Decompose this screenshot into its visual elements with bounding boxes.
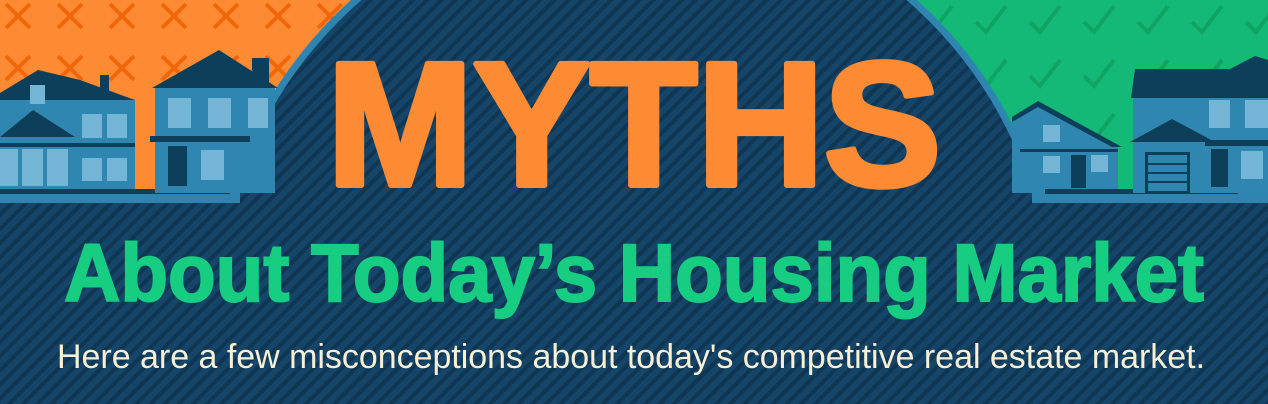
arc: central circle <box>240 0 1032 200</box>
title: MYTHS: MYTHS <box>327 27 941 223</box>
tagline: Here are a few misconceptions about today's competitive real estate market. <box>57 338 1205 376</box>
panel: orange X pattern <box>0 0 400 200</box>
houses: right <box>1012 56 1268 194</box>
panel: green check pattern <box>870 0 1268 200</box>
ground strips <box>0 193 1268 203</box>
houses: left <box>0 50 278 194</box>
subtitle: About Today’s Housing Market <box>64 228 1204 319</box>
